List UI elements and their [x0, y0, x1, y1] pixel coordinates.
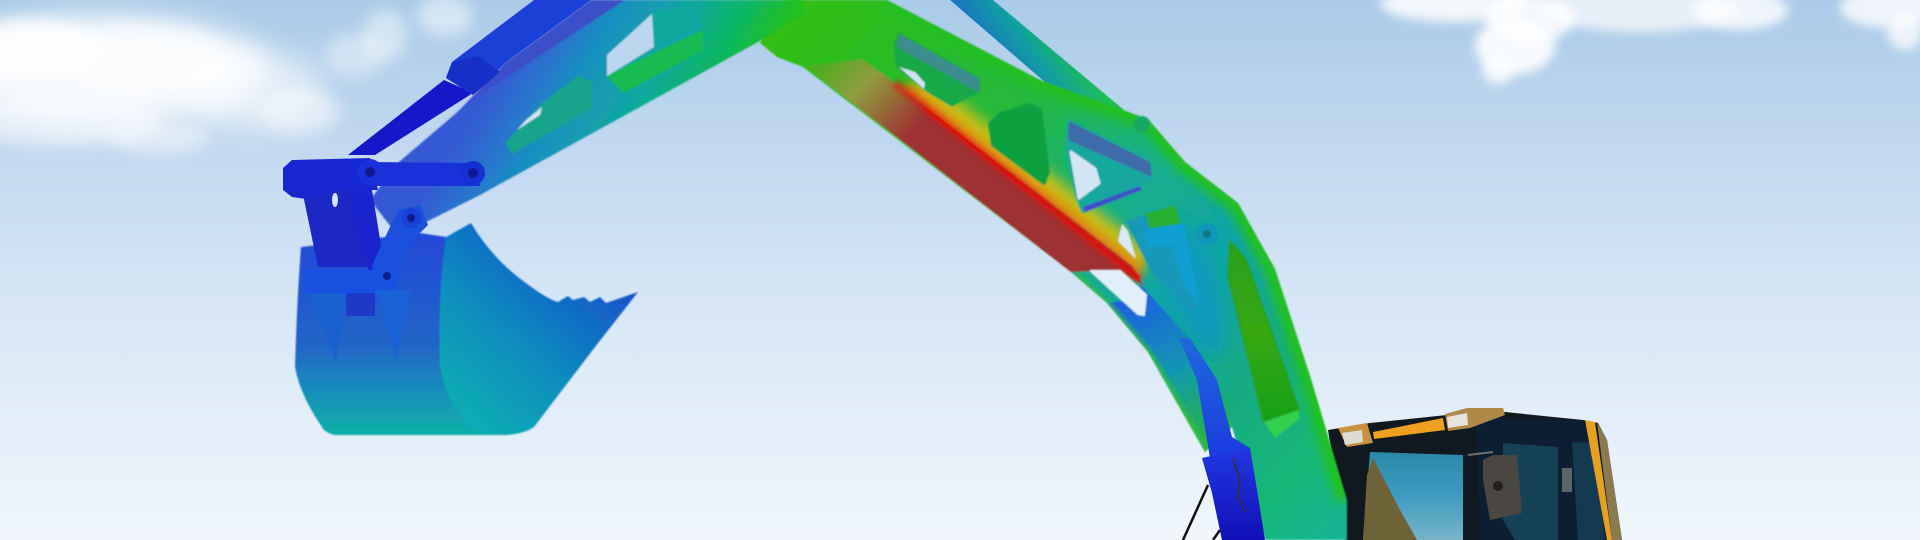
recess D — [1126, 205, 1199, 314]
bucket — [295, 223, 638, 435]
sky hole A — [899, 67, 925, 89]
red plate — [805, 59, 1144, 286]
sky hole C — [1071, 152, 1099, 198]
sky hole E — [1091, 271, 1146, 315]
interior yellow pillar — [1363, 458, 1417, 540]
second link — [346, 190, 385, 275]
stick arm — [370, 0, 806, 232]
front link — [372, 205, 428, 290]
clouds: top left — [0, 0, 473, 154]
recess B — [990, 105, 1048, 183]
recess 2 — [507, 77, 591, 152]
boom body — [760, 0, 1347, 540]
left bracket — [307, 293, 346, 360]
sky hole 1 — [607, 14, 654, 76]
recess A strip — [897, 34, 979, 92]
recess C — [1067, 121, 1152, 212]
front window — [1363, 452, 1463, 540]
hoses — [1183, 485, 1220, 540]
arm cylinder rod — [348, 80, 473, 155]
mirror — [1483, 455, 1522, 520]
mirror mount — [1493, 481, 1503, 491]
yellow cab stripe — [1585, 420, 1612, 540]
crack line — [1233, 458, 1245, 512]
arm cylinder barrel — [446, 0, 591, 95]
tan cab edge — [1597, 422, 1622, 540]
recess D pipe — [1144, 223, 1199, 303]
lower pin — [305, 270, 390, 293]
front link eye — [401, 208, 421, 228]
yellow roof — [1373, 418, 1445, 439]
horizontal link — [370, 162, 480, 186]
cylinder rod — [1179, 338, 1250, 458]
cylinder barrel — [1202, 448, 1265, 540]
oval recess lower face — [1264, 410, 1299, 438]
right bracket — [375, 290, 411, 358]
red high stress line — [925, 108, 1140, 278]
clouds: top right — [1380, 0, 1920, 84]
window in link — [332, 193, 338, 207]
arm cylinder — [348, 0, 591, 155]
bucket back — [295, 233, 487, 435]
left link plate — [301, 185, 370, 267]
stick top strip — [440, 0, 625, 130]
oval recess — [1228, 241, 1299, 422]
mirror arm — [1468, 452, 1493, 455]
lower pin eye — [376, 265, 398, 287]
recess 1 lower band — [607, 30, 703, 93]
excavator cab — [1328, 408, 1622, 540]
red high stress glow — [895, 83, 1140, 280]
sky hole 2 — [517, 107, 542, 130]
side window — [1572, 442, 1605, 540]
recess C lower streak — [1083, 186, 1142, 212]
pivot — [1196, 223, 1218, 245]
left light housing — [1338, 423, 1373, 447]
main hydraulic cylinder — [1179, 338, 1265, 540]
bracket web — [346, 293, 375, 316]
right lamp — [1447, 413, 1468, 428]
right light housing — [1445, 408, 1505, 431]
door handle — [1562, 468, 1572, 492]
bucket side plate — [440, 223, 638, 435]
upper pin — [283, 158, 378, 200]
arm cylinder gland — [446, 56, 500, 95]
stick body — [370, 0, 806, 232]
joint pin — [1134, 116, 1150, 132]
cab upper frame — [1476, 418, 1606, 540]
link eye left — [357, 159, 383, 185]
door window — [1503, 443, 1558, 540]
recess A — [895, 34, 979, 105]
lower arc outer green edge — [1074, 276, 1205, 452]
recess C strip — [1068, 121, 1152, 177]
recess D top — [1145, 205, 1181, 228]
sky hole D — [1118, 224, 1136, 259]
left lamp — [1342, 430, 1363, 445]
link eye right — [461, 161, 485, 185]
boom cylinder — [950, 0, 1124, 115]
boom — [760, 0, 1347, 540]
lower arc panel — [1107, 286, 1232, 452]
recess 1 — [607, 0, 703, 93]
bucket linkage — [283, 158, 485, 360]
cab body — [1328, 412, 1622, 540]
boom shading overlays — [887, 0, 1347, 500]
